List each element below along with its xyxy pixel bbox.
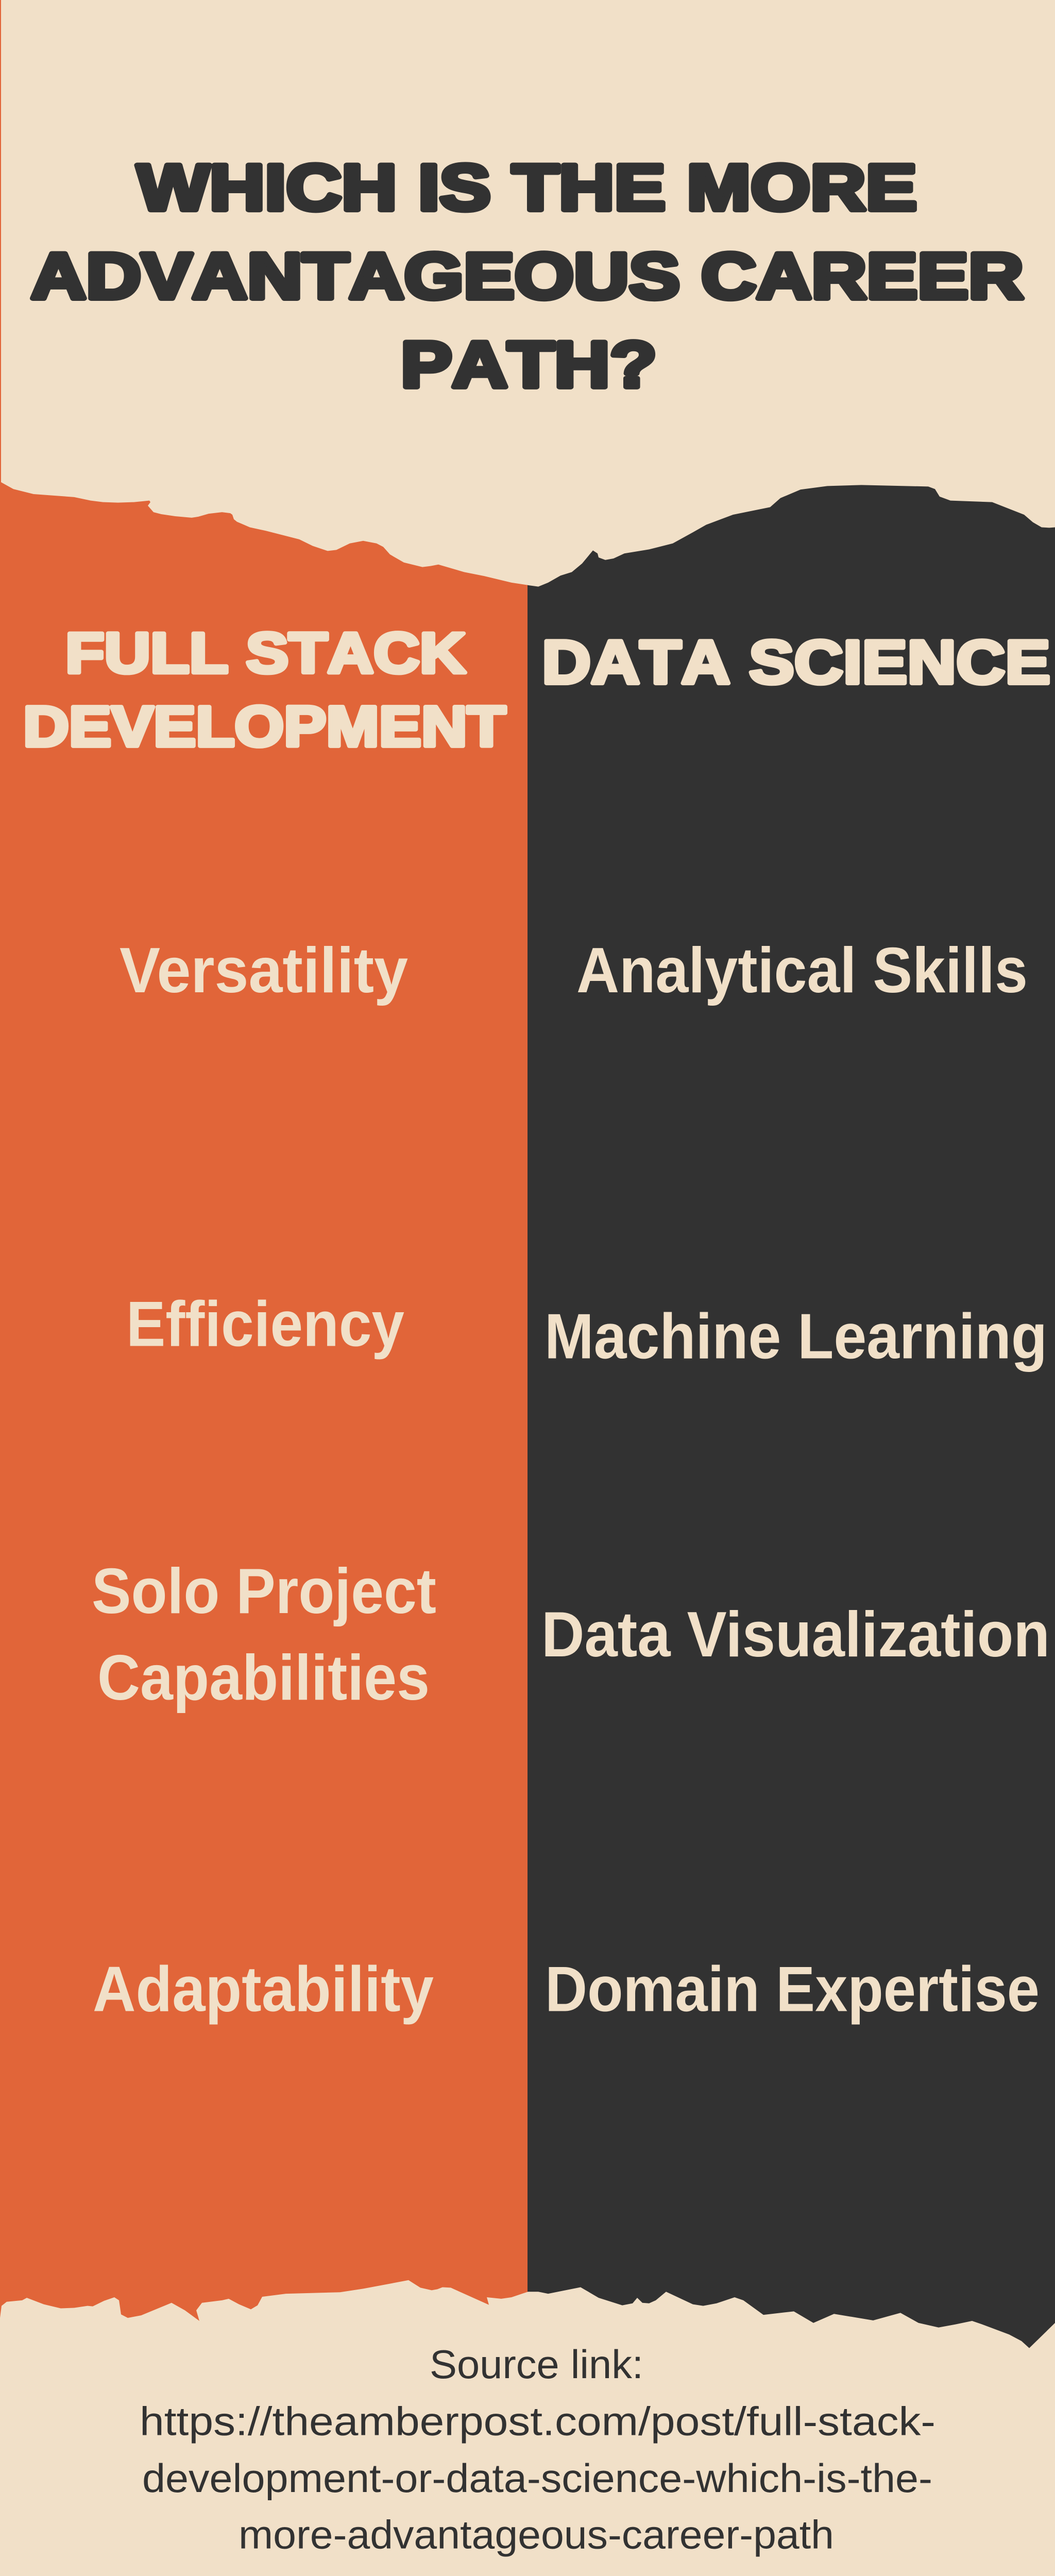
item: efficiency: Efficiency xyxy=(126,1288,404,1360)
item: adaptability: Adaptability xyxy=(93,1953,434,2025)
column heading: full stack development: DEVELOPMENT xyxy=(23,694,506,758)
source link: https://theamberpost.com/post/full-stack- xyxy=(140,2398,935,2444)
title: WHICH IS THE MORE xyxy=(137,152,917,224)
item: versatility: Versatility xyxy=(120,934,408,1006)
item: solo project capabilities: Solo Project xyxy=(92,1555,436,1627)
title: PATH? xyxy=(401,329,657,401)
source link: more-advantageous-career-path xyxy=(239,2512,834,2557)
column heading: full stack development: FULL STACK xyxy=(65,621,466,685)
source link xyxy=(140,2342,935,2557)
column heading: data science: DATA SCIENCE xyxy=(542,628,1050,697)
item: solo project capabilities xyxy=(92,1555,436,1714)
item: solo project capabilities: Capabilities xyxy=(97,1641,430,1714)
title: ADVANTAGEOUS CAREER xyxy=(31,240,1024,313)
source link: development-or-data-science-which-is-the- xyxy=(142,2455,932,2501)
source link: Source link: xyxy=(430,2342,643,2387)
panel: full stack development xyxy=(0,482,528,2321)
column heading: full stack development xyxy=(23,621,506,758)
panel: data science xyxy=(528,485,1055,2348)
title xyxy=(31,152,1024,401)
